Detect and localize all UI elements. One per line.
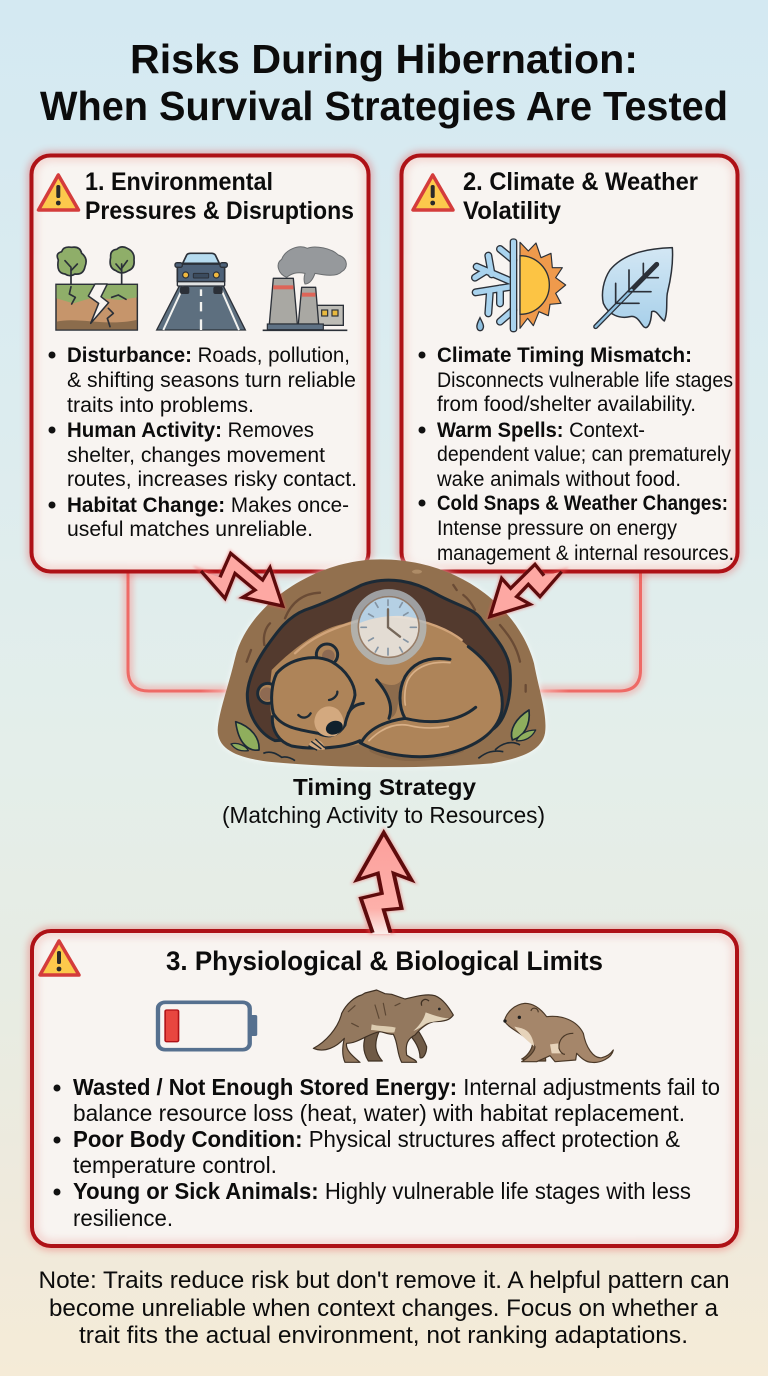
icon: half snowflake half sun [475, 239, 566, 332]
panel 2 bullets: wake animals without food. [436, 467, 681, 491]
panel 3 bullets [54, 1074, 720, 1231]
arrow: climate volatility to bear [490, 564, 562, 617]
title: Risks During Hibernation: [130, 36, 638, 82]
panel 1 bullets: Human Activity: Removes [67, 418, 314, 442]
illustration: sleeping bear in burrow with clock [218, 559, 545, 767]
leaves right [478, 710, 536, 758]
panel 1 heading [85, 168, 354, 225]
panel 1 bullets [48, 343, 357, 541]
panel 2 bullets: management & internal resources. [437, 541, 734, 565]
icon: thin animal [313, 990, 453, 1062]
bear head [272, 658, 355, 736]
bear outline [360, 647, 502, 757]
panel 1 bullets: traits into problems. [67, 393, 254, 417]
panel 3 bullets: resilience. [73, 1205, 173, 1231]
panel 3 bullets: Wasted / Not Enough Stored Energy: Internal adjustments fail to [73, 1074, 720, 1100]
panel 1 bullets: useful matches unreliable. [67, 517, 313, 541]
panel 1 bullets: Habitat Change: Makes once- [67, 493, 349, 517]
panel 3 bullets: Young or Sick Animals: Highly vulnerable life stages with less [73, 1178, 691, 1204]
panel 2: climate and weather [402, 156, 738, 572]
icon: cracked ground with trees [56, 247, 137, 330]
center label: timing strategy: Timing Strategy [293, 774, 476, 800]
panel 1 bullets: routes, increases risky contact. [67, 467, 357, 491]
panel 1 bullets: shelter, changes movement [67, 443, 325, 467]
panel 3 box [32, 931, 737, 1246]
bear haunch lines [362, 659, 476, 742]
panel 1: environmental pressures [32, 156, 368, 572]
panel 2 bullets: Climate Timing Mismatch: [437, 343, 692, 367]
panel 3 bullets: Poor Body Condition: Physical structures affect protection & [73, 1126, 680, 1152]
panel 2 bullets: from food/shelter availability. [437, 392, 696, 416]
bear [258, 614, 502, 759]
title [40, 36, 728, 129]
note [38, 1267, 730, 1349]
bear ears [258, 644, 338, 703]
panel 1 box [32, 156, 368, 572]
panel 1 heading: 1. Environmental [85, 168, 273, 196]
center label: timing strategy [222, 774, 545, 828]
panel 2 bullets [418, 343, 734, 565]
arrow: environmental pressures to bear [201, 553, 283, 606]
icon: factory with smoke [263, 247, 347, 330]
bear paw [309, 739, 325, 750]
icon: young animal [503, 1003, 613, 1062]
title: When Survival Strategies Are Tested [40, 83, 728, 129]
connector lines from panels to bear [128, 572, 640, 691]
note: Note: Traits reduce risk but don't remove it. A helpful pattern can [38, 1267, 730, 1294]
panel 2 heading [463, 168, 698, 225]
panel 2 heading: Volatility [463, 197, 561, 225]
burrow mound [218, 559, 545, 767]
icon: low battery [158, 1002, 257, 1050]
arrow: physiological limits to timing strategy [357, 833, 411, 934]
leaves left [231, 722, 295, 761]
center label: timing strategy: (Matching Activity to Resources) [222, 802, 545, 828]
panel 1 heading: Pressures & Disruptions [85, 197, 354, 225]
panel 3: physiological limits [32, 931, 737, 1246]
clock [354, 590, 425, 661]
panel 1 bullets: Disturbance: Roads, pollution, [67, 343, 350, 367]
panel 1 bullets: & shifting seasons turn reliable [67, 368, 356, 392]
panel 3 heading: 3. Physiological & Biological Limits [166, 946, 603, 976]
icon: frozen leaf [596, 248, 673, 328]
note: trait fits the actual environment, not ranking adaptations. [79, 1322, 688, 1349]
bear neck and lower jaw lines [272, 703, 363, 748]
panel 3 bullets: temperature control. [73, 1152, 277, 1178]
panel 2 bullets: Cold Snaps & Weather Changes: [437, 491, 728, 515]
burrow cavity [247, 580, 510, 741]
bear body [270, 614, 502, 756]
icon: warning triangle [40, 941, 79, 975]
bear belly fold [377, 680, 402, 718]
panel 2 bullets: Warm Spells: Context- [437, 418, 645, 442]
icon: warning triangle [413, 175, 453, 210]
panel 2 bullets: Disconnects vulnerable life stages [437, 368, 733, 392]
panel 2 box [402, 156, 738, 572]
icon: car on road [157, 253, 245, 330]
panel 2 heading: 2. Climate & Weather [463, 168, 698, 196]
icon: warning triangle [38, 175, 78, 210]
panel 2 bullets: dependent value; can prematurely [437, 442, 731, 466]
bear snout [298, 692, 345, 737]
panel 3 bullets: balance resource loss (heat, water) with habitat replacement. [73, 1100, 685, 1126]
panel 2 bullets: Intense pressure on energy [437, 516, 677, 540]
note: become unreliable when context changes. Focus on whether a [49, 1295, 719, 1322]
